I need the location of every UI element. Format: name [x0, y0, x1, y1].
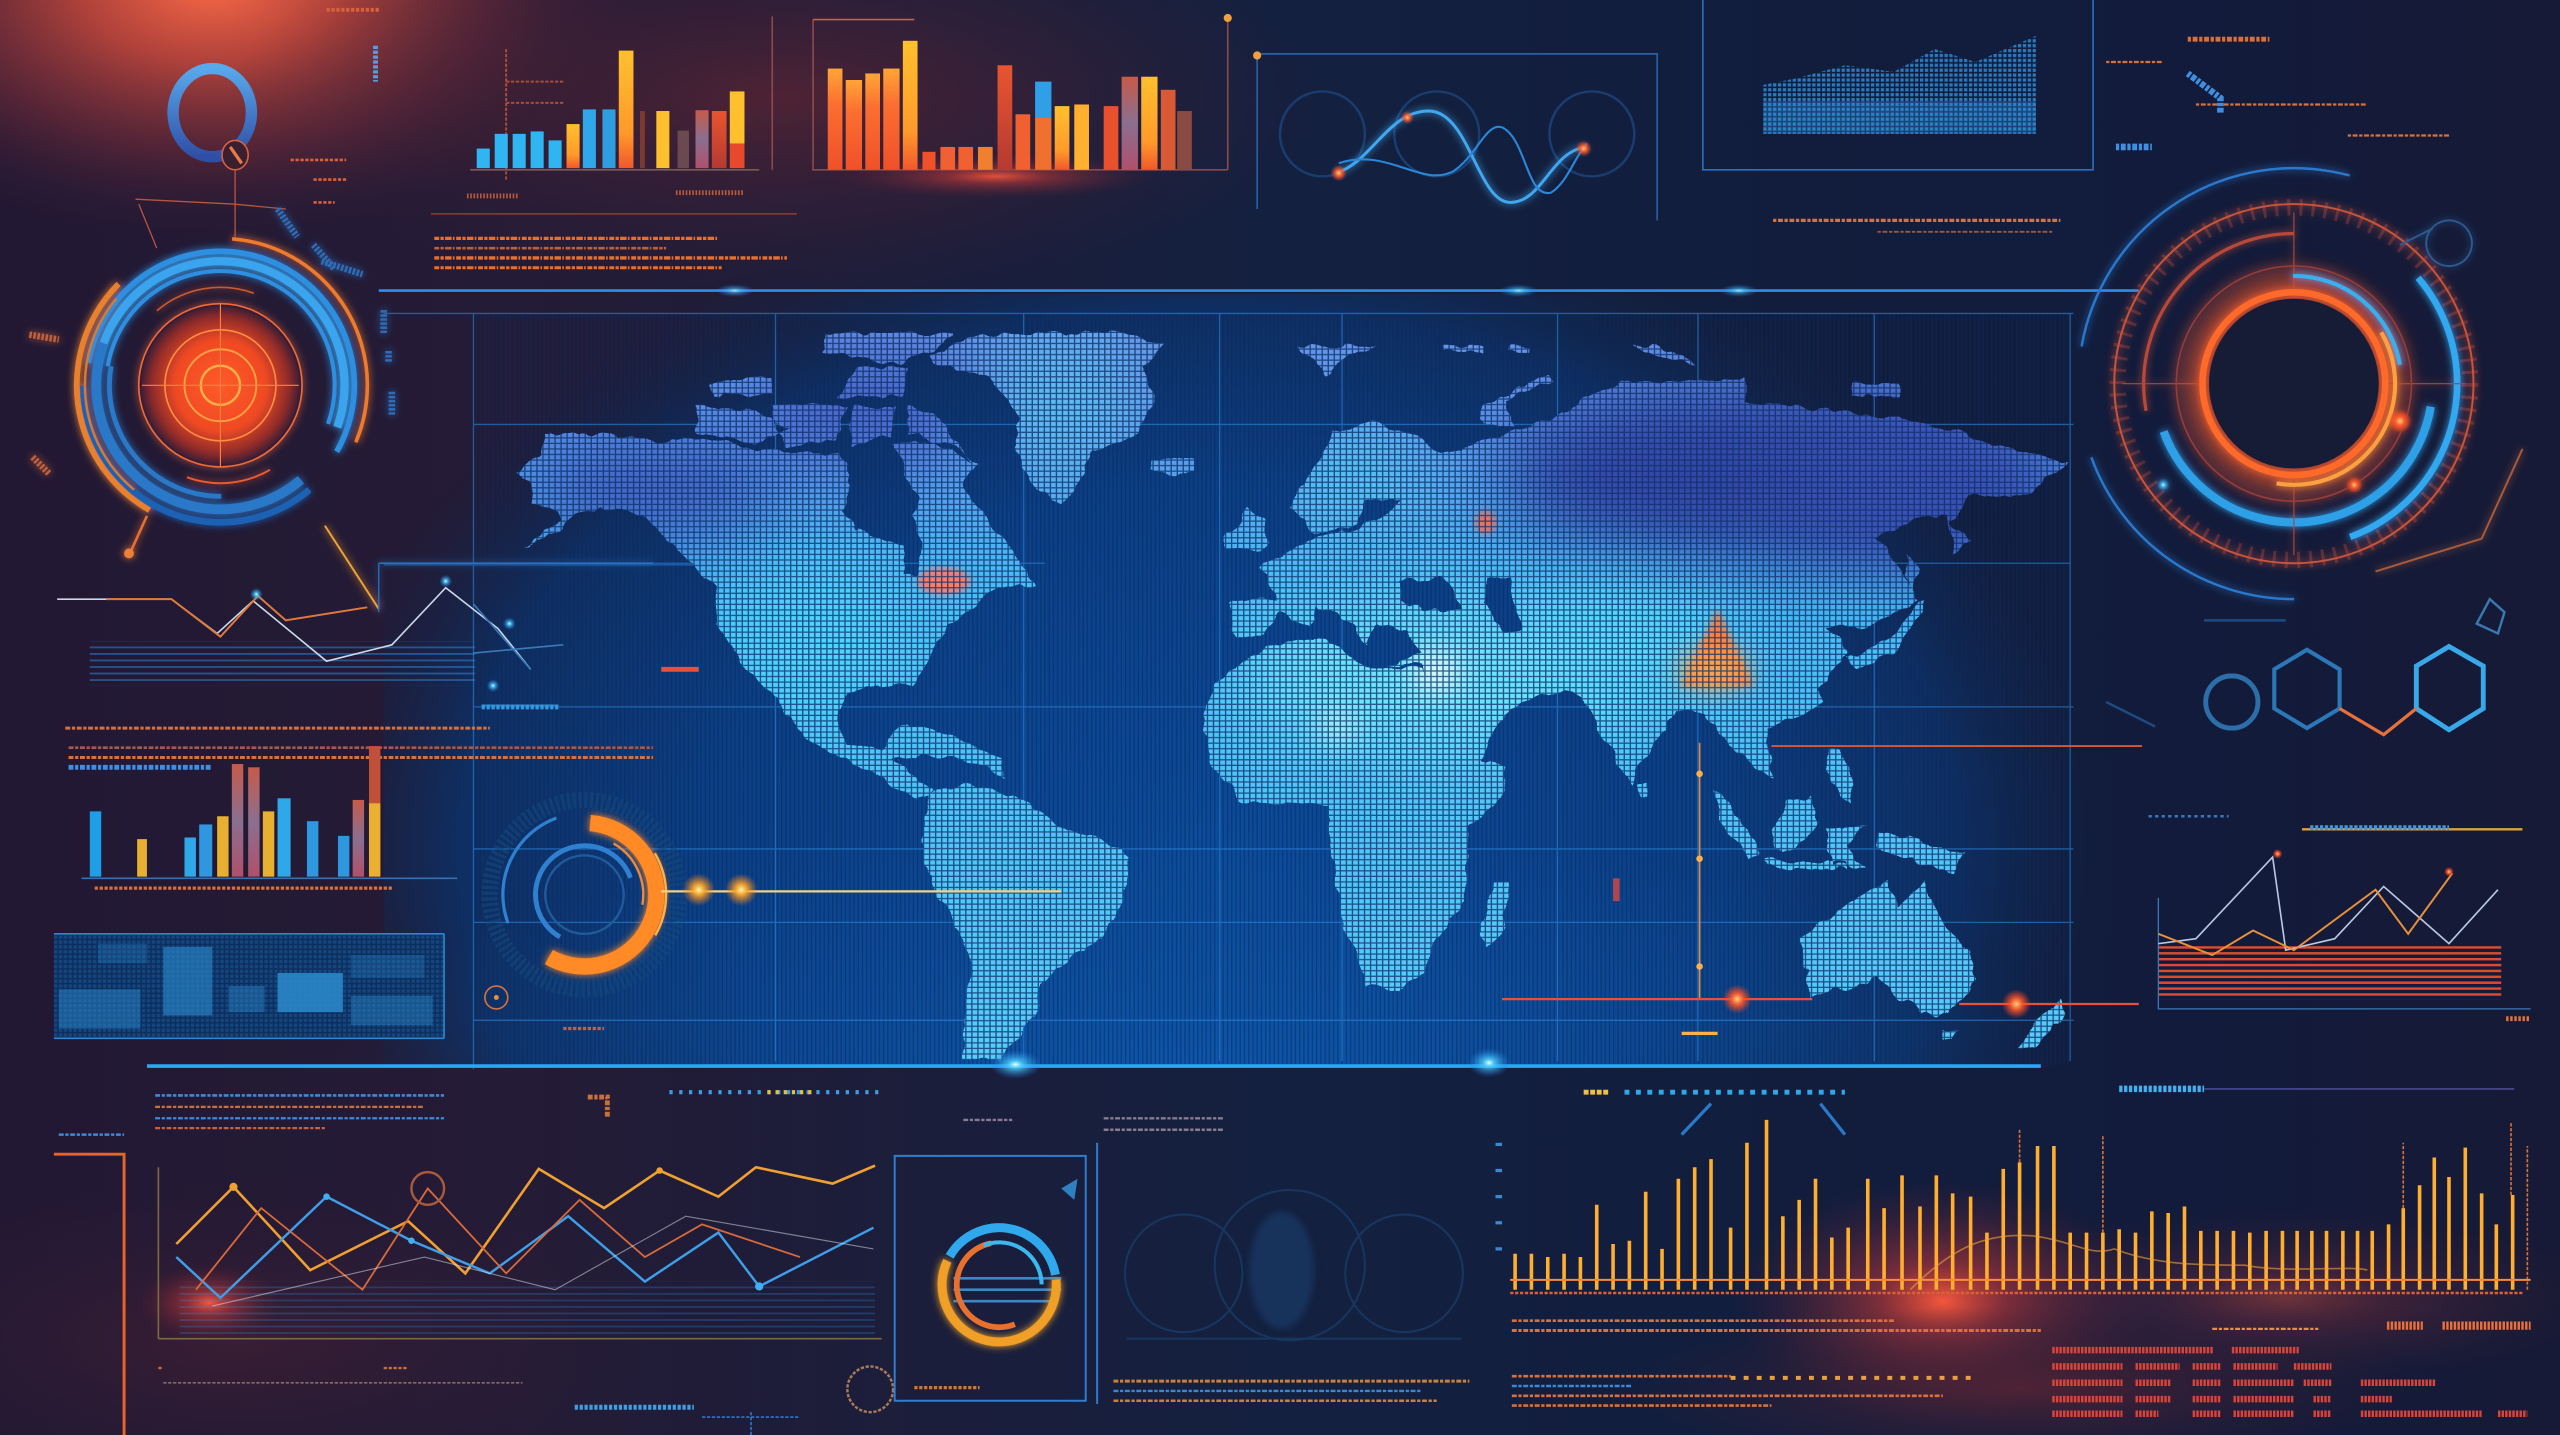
gauge side labels — [29, 209, 392, 473]
callout: vertical marker line — [1696, 743, 1703, 999]
panel: radial gauge right — [2044, 134, 2544, 633]
gauge orange arcs — [24, 189, 417, 582]
text block: label above bottom-right chart — [2119, 1087, 2514, 1091]
table: bottom-right red rows — [2052, 1350, 2527, 1414]
panel: right line chart — [2149, 816, 2531, 1019]
bar chart: top-centre — [772, 14, 1232, 199]
panel: radial gauge left — [24, 189, 653, 612]
panel: world map — [146, 284, 2142, 1078]
continents (dotted land) — [490, 310, 2090, 1077]
text block: small labels beside gauge top — [291, 10, 563, 202]
gauge pointers — [124, 516, 653, 612]
map grid lines — [384, 313, 2073, 1069]
gauge blue rings — [27, 192, 414, 578]
panel: area chart top-right — [1703, 0, 2093, 170]
map sea background — [384, 294, 2069, 1068]
panel: dim globe — [1125, 1190, 1463, 1340]
icon: hexagons — [2106, 599, 2504, 735]
bar chart: top-left — [470, 51, 759, 170]
icon: orange bracket — [54, 1154, 124, 1435]
bar chart: bottom-right — [1510, 1120, 2560, 1435]
panel: bottom-left line chart — [136, 1166, 882, 1342]
panel: heat table — [54, 934, 444, 1038]
text block: top-left caption — [431, 193, 797, 268]
indicator dots row — [669, 1092, 1845, 1265]
panel: bottom ring box — [895, 1143, 1097, 1404]
panel: line chart top-centre — [1253, 51, 1657, 220]
text block: bottom-left caption — [59, 1095, 1224, 1135]
icon: pendant ring top-left — [136, 69, 286, 248]
text block: left rows — [65, 728, 653, 767]
text block: bottom-centre caption — [1113, 1381, 1469, 1401]
text block: bottom-left footer — [158, 1366, 893, 1435]
panel: left line chart — [57, 575, 699, 707]
map frame lines — [147, 284, 2139, 1079]
gauge: orange ring with connector — [473, 783, 1061, 1028]
text block: bottom-right captions — [1512, 1321, 2531, 1406]
callout: horizontal orange markers — [1502, 746, 2142, 1035]
bar chart: left — [82, 746, 457, 888]
text block: top-right caption — [1773, 39, 2449, 232]
